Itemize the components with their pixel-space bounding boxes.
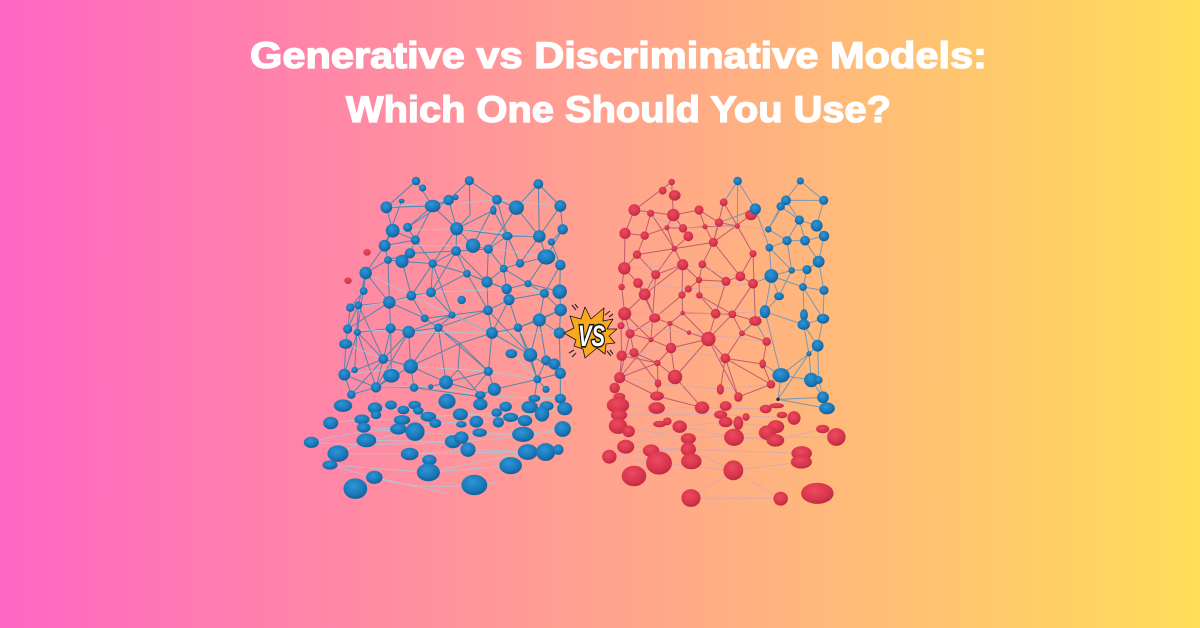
icon: VS comic burst badge: VS — [578, 320, 605, 353]
network: discriminative red model — [603, 177, 845, 506]
icon: VS comic burst badge — [564, 304, 617, 358]
blue network nodes — [304, 177, 572, 498]
title: Generative vs Discriminative Models: — [250, 35, 987, 76]
network: generative blue model — [304, 177, 572, 498]
red network edges — [609, 181, 836, 499]
title — [250, 35, 987, 130]
red network nodes — [603, 177, 845, 506]
title: Which One Should You Use? — [346, 89, 891, 130]
blue network edges — [311, 181, 565, 493]
